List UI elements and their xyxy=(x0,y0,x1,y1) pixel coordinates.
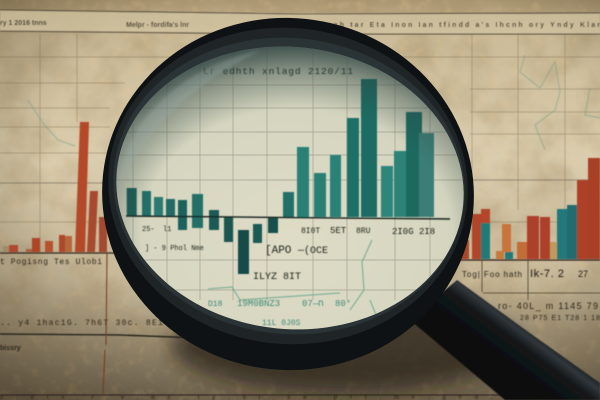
left axis labels: bissry xyxy=(0,345,21,352)
lens map lines and green notes: D18 xyxy=(208,300,223,309)
right table labels and lines: ro- 40L_ m 1145 79 xyxy=(498,301,598,311)
top header band: Melpr - fordifa's lnr xyxy=(126,22,189,29)
lens axis labels: 8RU xyxy=(356,227,371,236)
lens axis labels xyxy=(142,226,435,283)
lens axis labels: ] - 9 Phol Nme xyxy=(145,245,204,253)
top header band: ry 1 2016 tnns xyxy=(0,20,47,27)
lens axis labels: 2I0G xyxy=(392,227,414,237)
top header band: nrgh tar Eta Inon Ian tfindd a's Ihcnh ory Yndy Klar xyxy=(322,22,600,29)
right table labels and lines: 27 xyxy=(578,269,588,279)
right bar chart xyxy=(455,158,600,260)
lens edge shading xyxy=(116,46,464,248)
lens axis labels: 25- xyxy=(142,226,155,234)
lens map lines and green notes: 0ח—7 xyxy=(302,299,324,309)
lens grid xyxy=(116,54,462,300)
left axis labels: .. y4 1hac1G. 7h6T 30c. 8E1 1 xyxy=(0,319,175,328)
stained map lines on paper xyxy=(28,55,600,150)
top header band xyxy=(0,10,600,34)
magnifying glass rim xyxy=(85,0,491,388)
lens axis labels: 5ET xyxy=(330,226,347,236)
right table labels and lines: 28 P75 E1 T28 1 18 xyxy=(520,315,600,322)
magnified bars xyxy=(126,79,450,274)
right table labels and lines: Ik-7. 2 xyxy=(530,268,564,280)
lens axis labels: 2I8 xyxy=(419,227,435,237)
lens glass xyxy=(116,46,464,330)
lower page rules xyxy=(0,253,600,400)
shadow under magnifier xyxy=(170,297,520,393)
lens axis labels: l1 xyxy=(163,226,171,234)
lens map lines and green notes: 11L 0J0S xyxy=(262,319,301,328)
lens map lines and green notes xyxy=(208,240,378,328)
magnifying glass handle xyxy=(410,280,600,400)
lens map lines and green notes: 80° xyxy=(335,299,351,309)
lens axis labels: [APO xyxy=(265,245,292,257)
lens axis labels: ILYZ 8IT xyxy=(253,272,301,283)
lens edge highlight xyxy=(118,50,262,190)
lens axis labels: —(OCE xyxy=(297,245,328,257)
left bar chart xyxy=(0,122,116,253)
lens map lines and green notes: 19M0BNZ3 xyxy=(237,299,280,309)
right table labels and lines xyxy=(462,260,600,322)
paper chart grid xyxy=(0,34,600,252)
left axis labels: t Pogisng Tes Ulobi xyxy=(0,258,102,267)
right table labels and lines: Tog| Foo hath xyxy=(462,270,522,279)
lens heading: Lr edhth xnlagd 2120/11 xyxy=(203,66,353,77)
left axis labels xyxy=(0,258,175,352)
lens contents xyxy=(116,46,464,330)
lens axis labels: 8I0T xyxy=(301,227,320,236)
